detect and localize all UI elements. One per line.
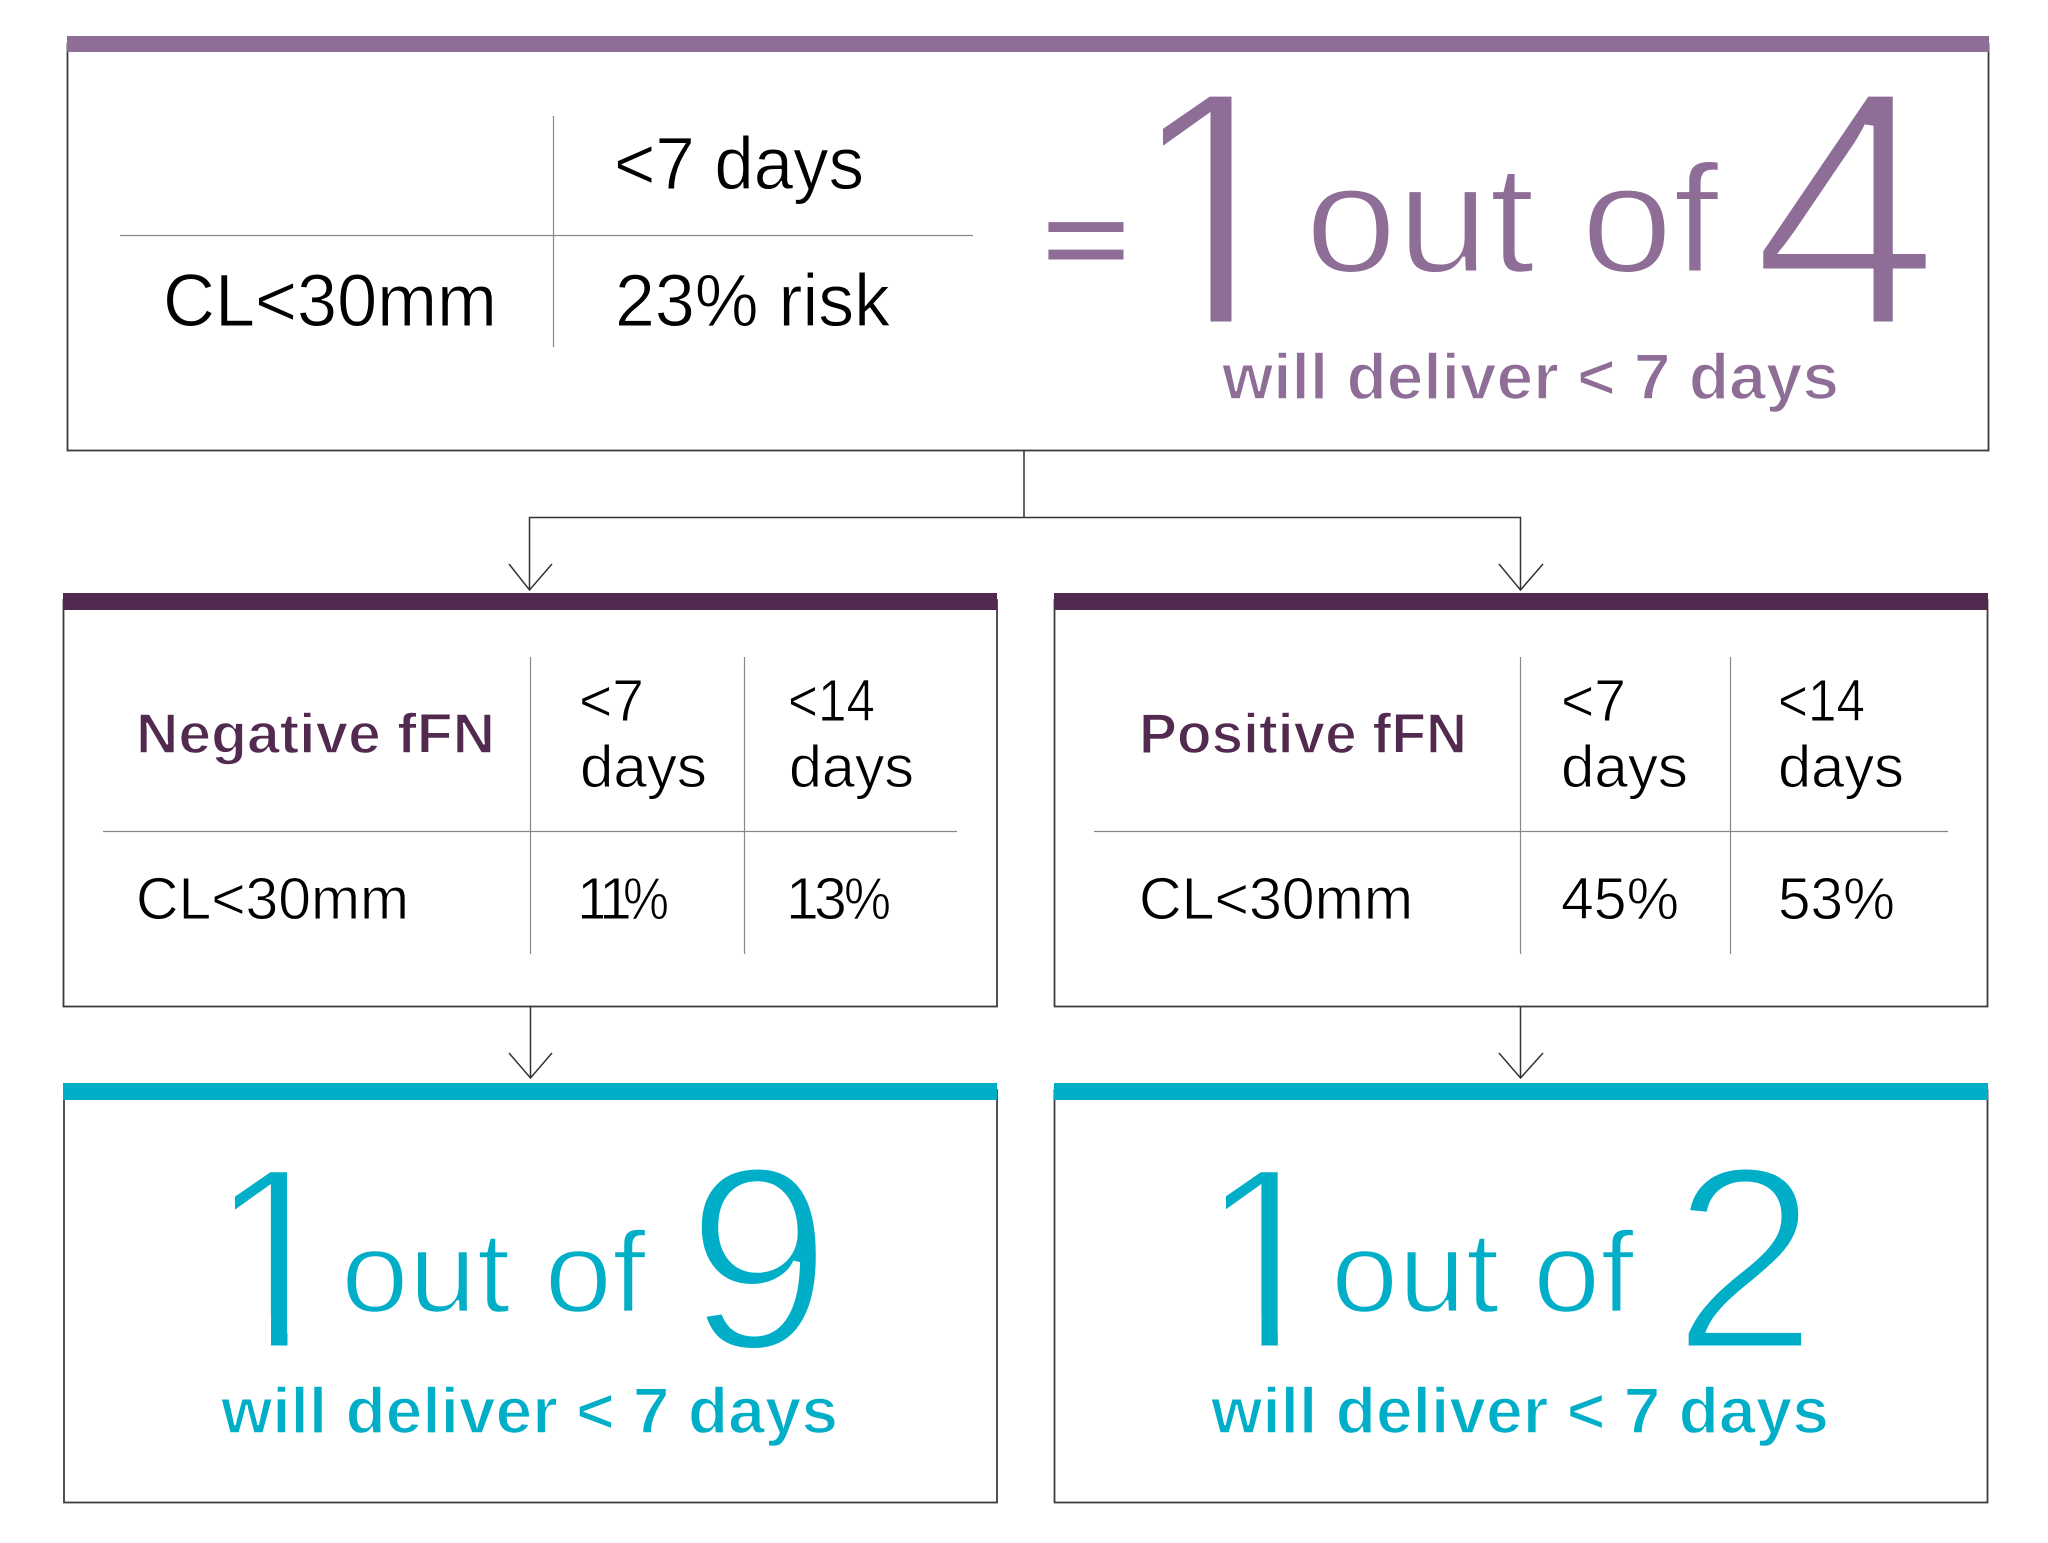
panel: overall CL risk [67,19,1989,450]
statistic: 1 out of 4: 4 [1751,19,1940,399]
panel: positive fFN [1054,593,1988,1006]
table: positive fFN: CL<30mm [1139,866,1413,932]
table: positive fFN: <7 [1561,668,1626,734]
statistic: 1 out of 9: 1 [202,1112,347,1405]
arrow: split connector [509,451,1543,590]
statistic: 1 out of 2: out of [1331,1209,1635,1337]
table: positive fFN: days [1778,734,1904,800]
value: 11% [577,866,669,932]
table: CL risk: <7 days [614,122,864,205]
table: positive fFN: 45% [1561,866,1679,932]
table: negative fFN: <14 [788,668,875,734]
value: 11%: 11 [577,866,632,932]
table: negative fFN: days [580,734,707,800]
panel: result 1 out of 9 [63,1083,997,1502]
table: positive fFN: days [1561,734,1688,800]
table: negative fFN: CL<30mm [136,866,409,932]
arrow: negative to result [509,1007,552,1078]
table: CL risk: 23% risk [615,259,891,342]
table: negative fFN: days [789,734,914,800]
arrow: positive to result [1499,1007,1543,1078]
equals sign: = [1042,178,1130,301]
statistic: 1 out of 4: 1 [1120,19,1310,399]
statistic: 1 out of 2 [1226,1168,1802,1349]
table: positive fFN: <14 [1778,668,1865,734]
table: negative fFN [103,657,957,954]
caption: will deliver: will deliver < 7 days [1221,340,1839,413]
statistic: 1 out of 9 [235,1170,816,1348]
table: CL risk: CL<30mm [163,259,497,342]
table: positive fFN [1094,657,1948,954]
table: positive fFN: 53% [1778,866,1895,932]
value: 11%: % [623,866,669,932]
value: 13% [786,866,891,932]
statistic: 1 out of 2: 2 [1672,1112,1818,1405]
statistic: 1 out of 9: 9 [686,1112,832,1405]
statistic: 1 out of 4 [1163,96,1926,322]
caption: will deliver: will deliver < 7 days [1210,1374,1829,1447]
statistic: 1 out of 4: out of [1305,133,1720,305]
table: positive fFN: Positive fFN [1139,702,1467,766]
statistic: 1 out of 2: 1 [1192,1112,1338,1405]
panel: result 1 out of 2 [1054,1083,1988,1502]
panel: negative fFN [63,593,997,1006]
value: 13%: % [844,866,891,932]
value: 13%: 13 [786,866,847,932]
table: CL risk [120,116,973,347]
caption: will deliver: will deliver < 7 days [220,1374,838,1447]
statistic: 1 out of 9: out of [341,1209,647,1337]
panel header bar [67,36,1989,52]
table: negative fFN: Negative fFN [136,702,495,766]
table: negative fFN: <7 [579,668,644,734]
